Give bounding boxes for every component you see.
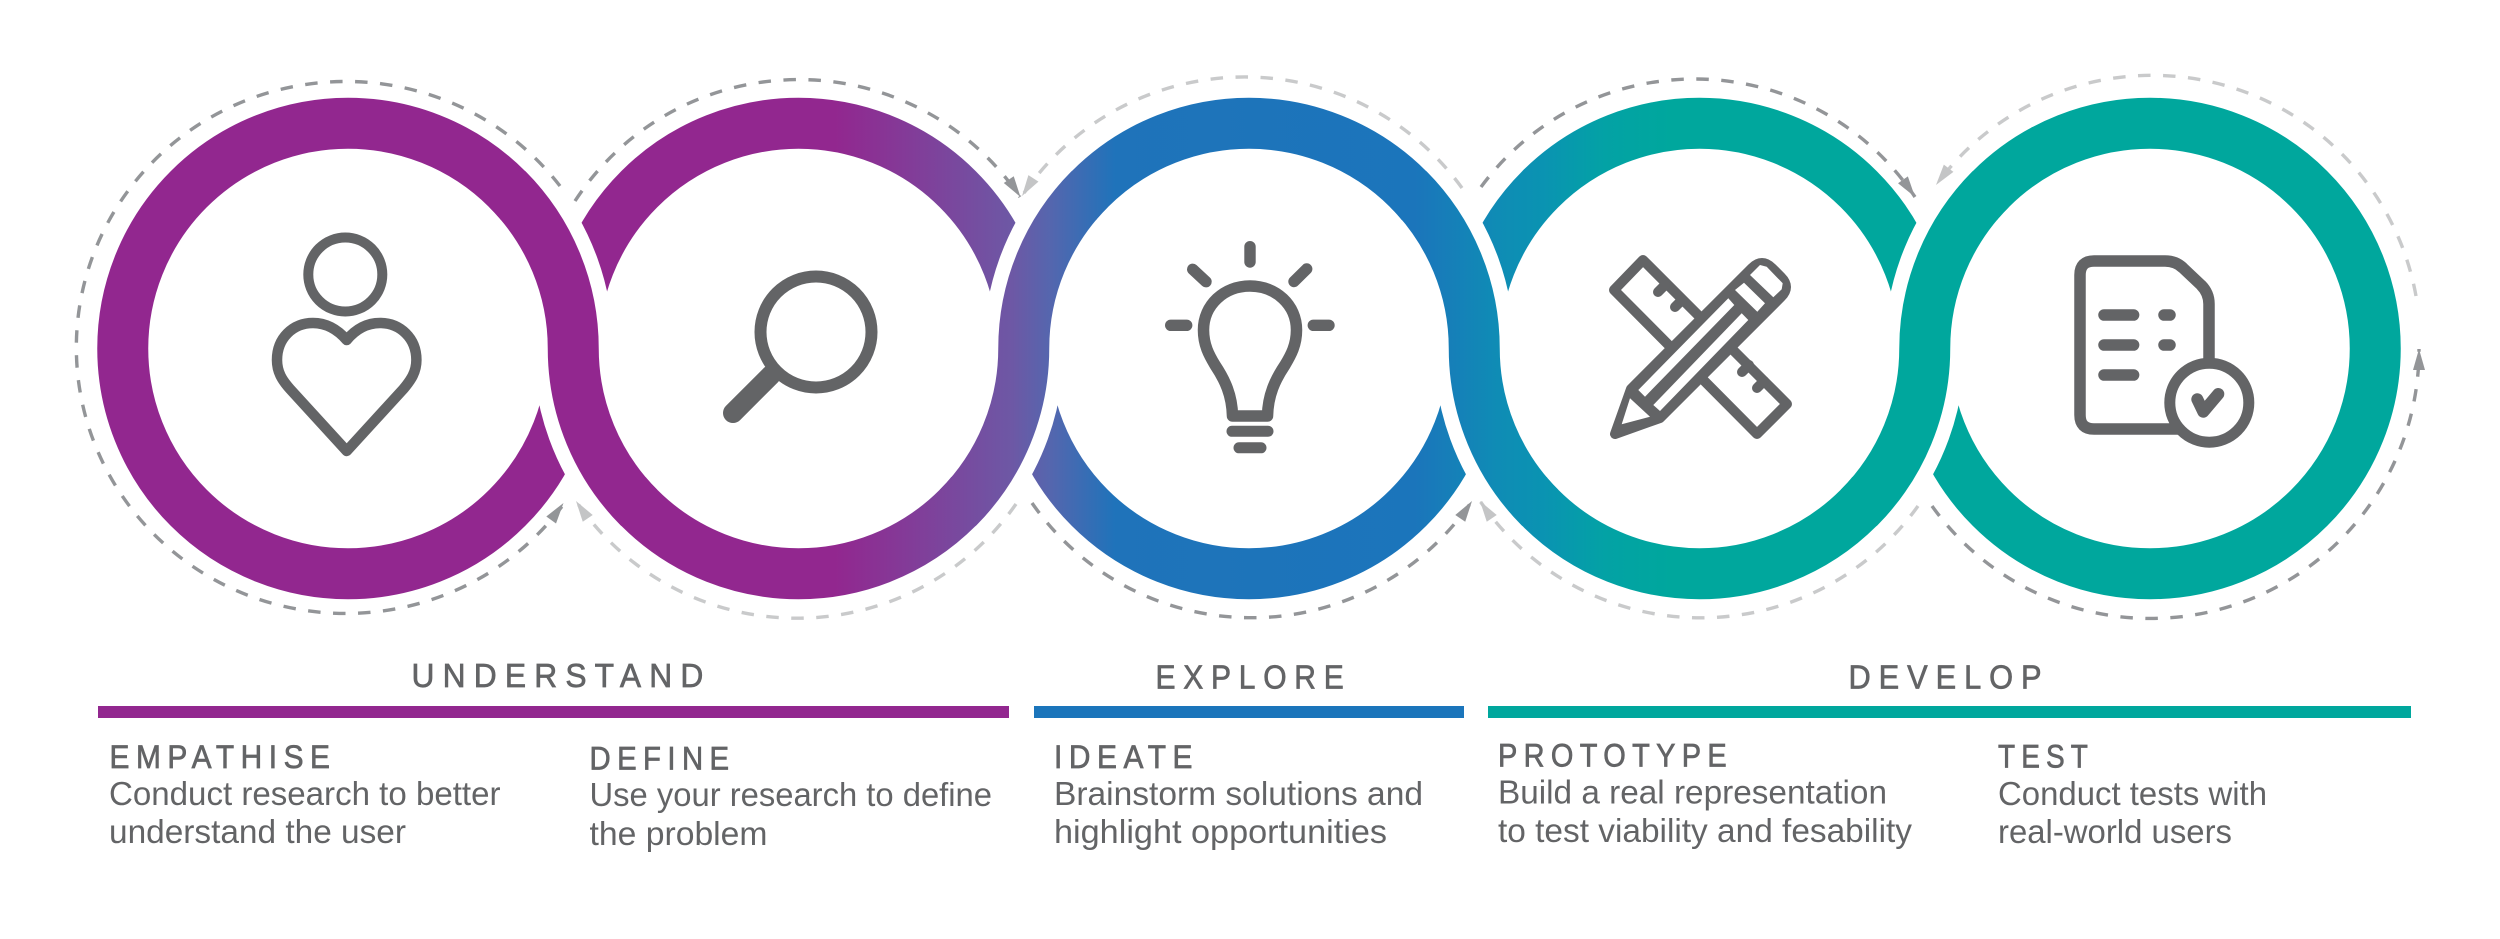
dashed cycle arrows — [76, 75, 2425, 618]
text block: define — [590, 740, 992, 852]
section: understand — [98, 657, 1009, 718]
text block: empathise: Conduct research to better — [109, 775, 501, 812]
junction band: define to ideate — [958, 189, 1090, 508]
heading: explore: EXPLORE — [1156, 658, 1352, 696]
text block: empathise: understand the user — [109, 813, 406, 850]
heading: understand: UNDERSTAND — [412, 657, 712, 694]
arrowhead: define bottom — [571, 498, 593, 522]
arrowhead: ideate bottom — [1455, 498, 1477, 522]
icon: light bulb — [1171, 247, 1329, 448]
text block: define: DEFINE — [590, 740, 736, 776]
text block: empathise — [109, 739, 501, 850]
ring: define — [573, 123, 1024, 574]
text block: empathise: EMPATHISE — [110, 739, 336, 775]
dashed arc: test top — [1936, 75, 2416, 296]
dashed arc: ideate top — [1022, 77, 1462, 196]
ring: prototype — [1474, 123, 1925, 574]
icon: magnifying glass — [733, 276, 872, 413]
icon: person with heart — [277, 238, 416, 451]
arrowhead: test right — [2413, 349, 2425, 370]
bar: explore — [1034, 706, 1464, 718]
interlaced ring chain — [123, 123, 2375, 574]
junction gap: prototype to test — [1872, 204, 1977, 493]
dashed arc: define top — [575, 80, 1020, 201]
arrowhead: empathise — [546, 499, 568, 524]
text block: test: TEST — [1998, 739, 2094, 775]
text block: ideate: highlight opportunities — [1054, 813, 1387, 850]
bar: develop — [1488, 706, 2411, 718]
pencil body — [1615, 263, 1786, 434]
ring: empathise — [123, 123, 573, 574]
ring: test — [1925, 123, 2375, 574]
ruler — [1614, 260, 1787, 434]
junction gap: empathise to define — [521, 204, 626, 493]
section: develop — [1488, 658, 2411, 718]
arrowhead: prototype bottom — [1475, 498, 1497, 522]
text block: prototype: PROTOTYPE — [1498, 738, 1733, 774]
dashed arc: prototype top — [1481, 79, 1915, 197]
dashed arc: empathise — [76, 81, 563, 613]
text block: prototype — [1498, 738, 1912, 849]
text block: prototype: to test viability and fesability — [1498, 812, 1912, 849]
text block: prototype: Build a real representation — [1498, 773, 1887, 810]
arrowhead: prototype top — [1898, 176, 1920, 200]
junction gap: ideate to prototype — [1422, 204, 1527, 493]
text block: ideate — [1054, 739, 1423, 850]
dashed arc: ideate bottom — [1032, 501, 1472, 618]
heading: develop: DEVELOP — [1848, 658, 2050, 696]
ring: ideate — [1024, 123, 1474, 574]
arrowhead: test top — [1931, 165, 1953, 189]
text block: ideate: IDEATE — [1054, 739, 1199, 775]
pencil highlights — [1622, 265, 1783, 424]
junction band: prototype to test — [1859, 189, 1991, 508]
dashed arc: prototype bottom — [1480, 501, 1918, 618]
dashed arc: test bottom — [1932, 349, 2419, 618]
icon: document with check — [2080, 261, 2249, 442]
junction gap: define to ideate — [971, 204, 1076, 493]
section: explore — [1034, 658, 1464, 718]
text block: test: real-world users — [1998, 813, 2232, 850]
text block: test: Conduct tests with — [1998, 775, 2267, 812]
text block: ideate: Brainstorm solutions and — [1054, 775, 1423, 812]
bar: understand — [98, 706, 1009, 718]
text block: define: Use your research to define — [590, 776, 992, 813]
text block: test — [1998, 739, 2267, 850]
text block: define: the problem — [590, 815, 768, 852]
ruler ticks — [1658, 285, 1764, 388]
arrowhead: define top — [1004, 176, 1025, 200]
dashed arc: define bottom — [576, 501, 1016, 618]
arrowhead: ideate top — [1017, 175, 1038, 199]
junction band: ideate to prototype — [1408, 189, 1540, 508]
junction band: empathise to define — [507, 189, 639, 508]
icon: pencil and ruler — [1614, 260, 1787, 434]
